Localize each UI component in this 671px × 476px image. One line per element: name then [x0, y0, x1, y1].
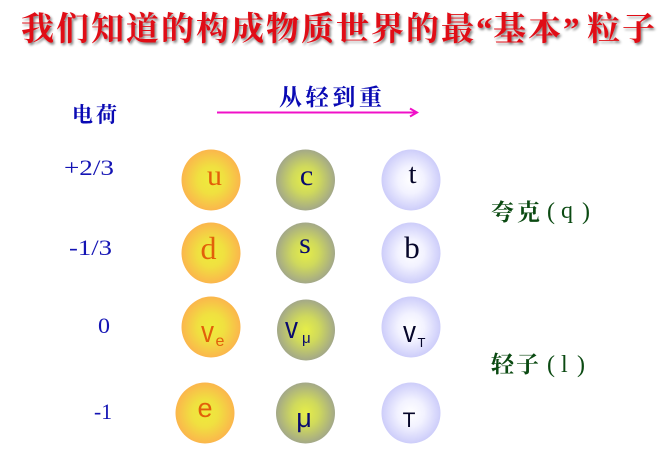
label: leptons: ) [577, 352, 585, 378]
particle: t: t [408, 158, 417, 190]
particle: electron neutrino: e [216, 333, 224, 350]
label: leptons [491, 352, 585, 378]
particle: tau: T [403, 409, 416, 432]
particle: muon neutrino: μ [302, 330, 311, 347]
particle: tau neutrino [382, 296, 440, 358]
particle: electron neutrino [182, 296, 240, 358]
charge: +2/3: +2/3 [64, 155, 114, 180]
particle: tau [382, 382, 440, 444]
particle: electron [176, 382, 234, 444]
particle: b: b [404, 230, 420, 265]
charge labels [64, 155, 114, 424]
particle: c: c [300, 159, 313, 192]
title: 我们知道的构成物质世界的最“基本”粒子 [21, 11, 655, 48]
particle: t [382, 150, 440, 210]
particle: muon neutrino: v [285, 310, 298, 345]
label: quarks [491, 198, 590, 225]
particle: u [182, 150, 240, 210]
particle: electron neutrino: v [201, 314, 214, 349]
particle: tau neutrino: T [418, 335, 426, 350]
heading: charge column: 电荷 [72, 103, 117, 127]
particle: u: u [207, 159, 222, 192]
label: leptons: 轻 [491, 352, 515, 377]
particle: electron: e [197, 393, 213, 423]
label: leptons: 子 [516, 352, 539, 377]
label: leptons: l [561, 352, 568, 378]
particle: s: s [299, 227, 311, 260]
particle: d: d [200, 230, 216, 266]
particle: s [276, 222, 335, 284]
particle: muon [276, 382, 335, 444]
label: quarks: 克 [517, 200, 540, 225]
charge: -1/3: -1/3 [69, 235, 112, 260]
label: quarks: ( [547, 199, 555, 225]
particle: c [276, 150, 335, 210]
heading: light to heavy: 从轻到重 [279, 85, 382, 110]
label: quarks: ) [582, 199, 590, 225]
particle: muon: μ [296, 403, 312, 433]
label: leptons: ( [547, 352, 555, 378]
label: quarks: 夸 [491, 200, 514, 225]
particle: tau neutrino: v [403, 314, 416, 349]
label: quarks: q [561, 198, 573, 224]
charge: 0: 0 [98, 313, 110, 338]
particle: muon neutrino [277, 300, 335, 360]
arrow: mass direction [217, 108, 417, 116]
charge: -1: -1 [94, 399, 112, 424]
particle: d [182, 222, 240, 284]
particle: b [382, 222, 440, 284]
